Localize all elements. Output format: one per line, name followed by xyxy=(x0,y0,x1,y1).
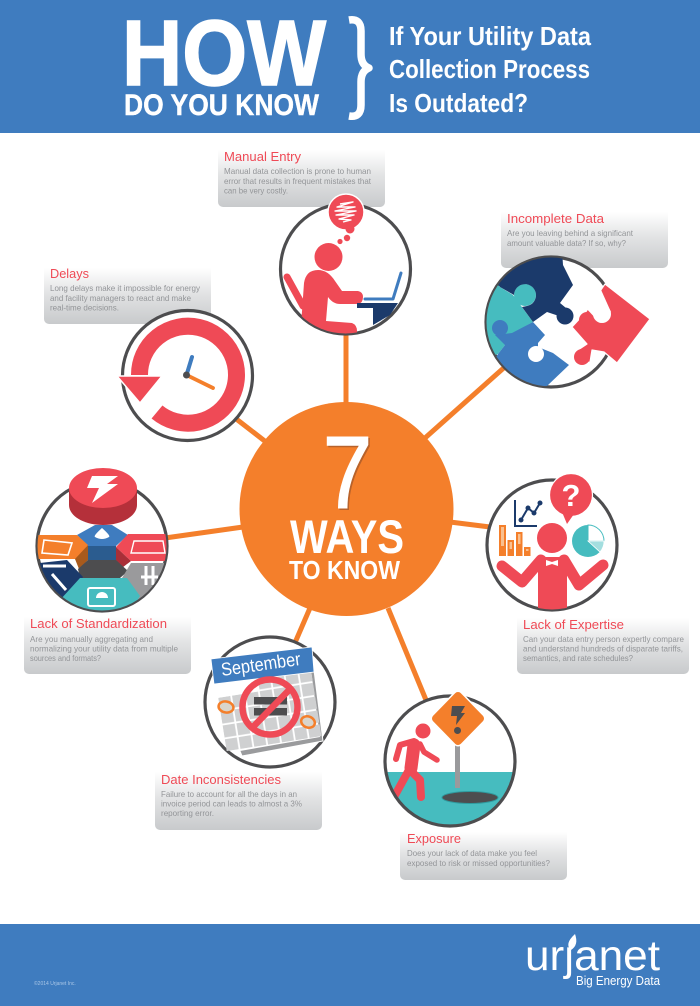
laptop xyxy=(365,273,401,299)
torso and arms xyxy=(538,557,567,612)
clock hands xyxy=(186,357,192,375)
copyright: ©2014 Urjanet Inc. xyxy=(34,980,76,987)
hole xyxy=(442,792,498,804)
blue piece xyxy=(495,322,569,386)
panel: Date Inconsistencies: Failure to account for all the days in an xyxy=(161,789,297,799)
panel: Lack of Expertise: semantics, and rate schedules? xyxy=(523,653,633,663)
panel: Exposure xyxy=(400,831,567,880)
logo leaf xyxy=(565,934,576,950)
icon: calendar with prohibition sign xyxy=(205,637,335,767)
panel: Exposure: Exposure xyxy=(407,831,461,846)
centre circle: 7 ways to know: 7 xyxy=(324,417,374,531)
red arrow ring xyxy=(139,326,236,423)
prohibition sign xyxy=(242,680,298,734)
bow tie xyxy=(546,560,558,566)
brace xyxy=(349,20,369,116)
panel: Manual Entry: Manual Entry xyxy=(224,149,301,164)
subtitle: Is Outdated? xyxy=(389,88,528,118)
centre circle: 7 ways to know xyxy=(240,402,454,616)
teal piece xyxy=(486,286,533,355)
head xyxy=(537,523,567,553)
panel: Delays: Delays xyxy=(50,266,89,281)
panel: Exposure: exposed to risk or missed opportunities? xyxy=(407,858,550,868)
centre circle: 7 ways to know: TO KNOW xyxy=(289,555,400,585)
panel: Incomplete Data: Incomplete Data xyxy=(507,211,605,226)
pie chart xyxy=(572,525,604,557)
seated body xyxy=(302,270,363,334)
red piece xyxy=(572,284,650,364)
panel: Manual Entry: Manual data collection is prone to human xyxy=(224,166,371,176)
icon: utility hexagon with button xyxy=(30,468,172,620)
day cells xyxy=(215,668,321,751)
centre circle: 7 ways to know: 7 xyxy=(323,416,372,530)
panel: Date Inconsistencies: reporting error. xyxy=(161,808,214,818)
icon: person at laptop xyxy=(280,194,410,340)
panel: Manual Entry: can be very costly. xyxy=(224,186,288,196)
panel: Lack of Expertise: Lack of Expertise xyxy=(523,617,624,632)
header band xyxy=(0,0,700,133)
warning sign xyxy=(436,696,480,741)
panel: Lack of Standardization: Lack of Standardization xyxy=(30,616,167,631)
panel: Manual Entry xyxy=(218,149,385,207)
panel: Lack of Expertise: Can your data entry person expertly compare xyxy=(523,634,684,644)
panel: Lack of Expertise: and understand hundreds of disparate tariffs, xyxy=(523,644,683,654)
panel: Exposure: Does your lack of data make you feel xyxy=(407,848,537,858)
panel: Date Inconsistencies xyxy=(155,772,322,830)
panel: Delays: Long delays make it impossible for energy xyxy=(50,283,201,293)
logo tagline: Big Energy Data xyxy=(576,973,661,988)
subtitle: Collection Process xyxy=(389,54,590,84)
icon: man approaching open hole xyxy=(380,696,520,832)
panel: Delays: and facility managers to react and make xyxy=(50,293,191,303)
icon: clock with return arrow xyxy=(117,310,252,440)
title: DO YOU KNOW: DO YOU KNOW xyxy=(124,89,320,122)
panel: Lack of Standardization: sources and formats? xyxy=(30,653,101,663)
navy piece xyxy=(498,258,573,322)
title: HOW: HOW xyxy=(122,1,326,105)
panel: Incomplete Data: amount valuable data? If so, why? xyxy=(507,238,626,248)
panel: Lack of Standardization xyxy=(24,616,191,674)
panel: Date Inconsistencies: invoice period can leads to almost a 3% xyxy=(161,798,302,808)
chair back xyxy=(287,277,303,306)
icon: confused person with charts xyxy=(487,474,617,612)
subtitle: If Your Utility Data xyxy=(389,21,591,51)
question bubble: ? xyxy=(562,478,580,513)
circled dates xyxy=(218,700,234,714)
panel: Lack of Standardization: normalizing your utility data from multiple xyxy=(30,644,178,654)
bar chart xyxy=(499,525,530,556)
not-equal bars xyxy=(254,697,287,704)
centre circle: 7 ways to know: WAYS xyxy=(290,510,404,563)
sign post xyxy=(455,745,460,788)
thought bubble xyxy=(328,194,364,230)
panel: Incomplete Data xyxy=(501,211,668,268)
panel: Incomplete Data: Are you leaving behind a significant xyxy=(507,228,634,238)
desk xyxy=(357,303,398,325)
line chart xyxy=(515,500,542,526)
head xyxy=(314,243,342,271)
panel: Delays xyxy=(44,266,211,324)
panel: Delays: real-time decisions. xyxy=(50,302,119,312)
spokes connecting centre to circles xyxy=(165,330,507,700)
red button xyxy=(69,488,137,525)
month header: September xyxy=(220,648,302,680)
man xyxy=(394,741,437,797)
footer band xyxy=(0,924,700,1006)
panel: Lack of Expertise xyxy=(517,617,689,674)
subtitle xyxy=(389,21,591,118)
panel: Date Inconsistencies: Date Inconsistencies xyxy=(161,772,281,787)
icon: puzzle pieces xyxy=(480,250,650,390)
panel: Manual Entry: error that results in frequent mistakes that xyxy=(224,176,372,186)
panel: Lack of Standardization: Are you manually aggregating and xyxy=(30,634,153,644)
calendar page xyxy=(212,670,323,756)
logo: urjanet: urjanet xyxy=(525,932,660,980)
